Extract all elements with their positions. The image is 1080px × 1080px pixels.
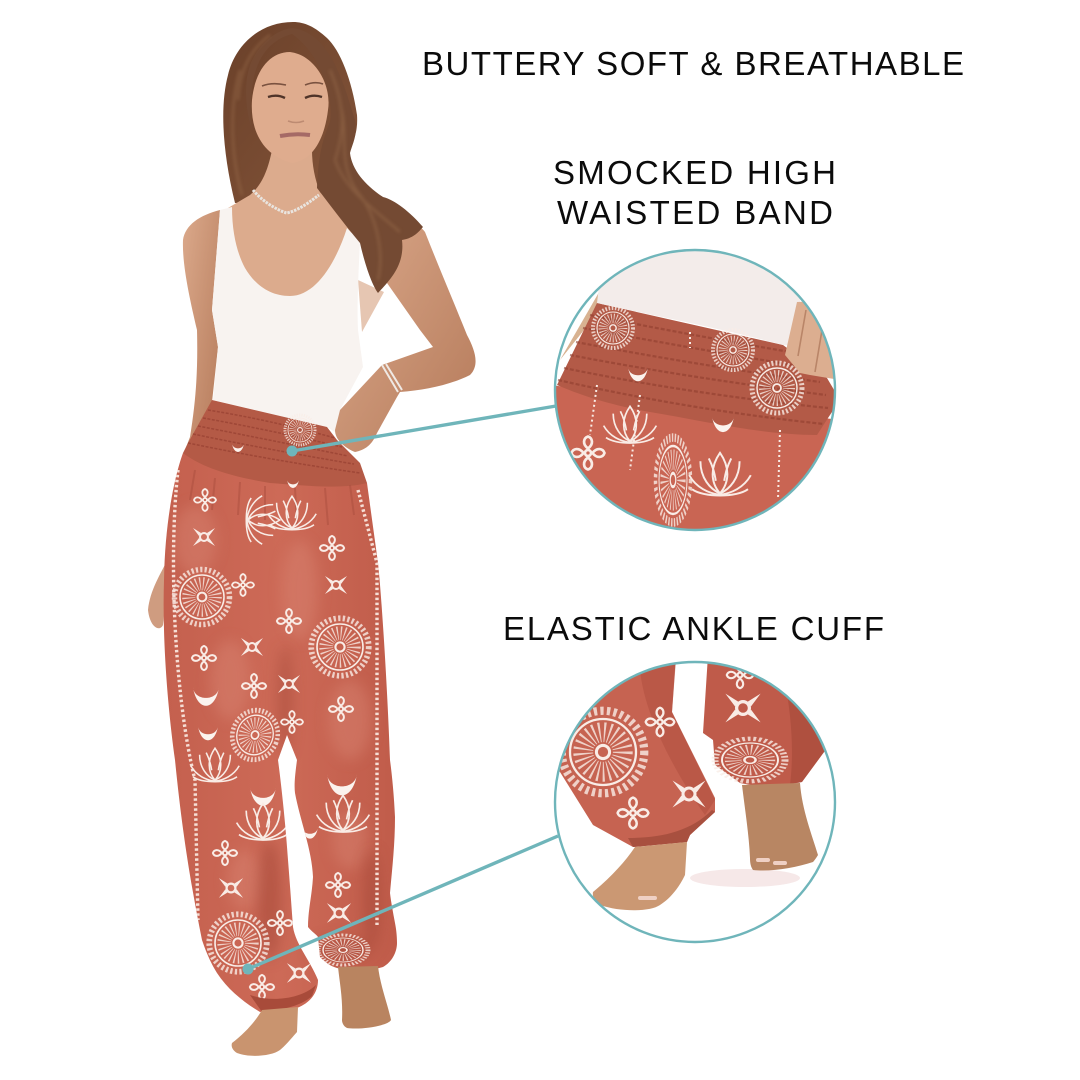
inset circle: ankle cuff detail — [550, 655, 840, 945]
waist pattern accents — [232, 415, 315, 488]
neck and chest — [228, 150, 352, 300]
pants body — [164, 453, 397, 1012]
bracelet — [382, 364, 402, 392]
inset prints — [562, 662, 785, 828]
inset ring — [555, 662, 835, 942]
mandalas — [174, 570, 369, 972]
waist gathers — [190, 470, 354, 525]
inset left pant leg — [560, 664, 715, 847]
left hand — [148, 555, 170, 628]
heading: elastic ankle cuff: ELASTIC ANKLE CUFF — [503, 610, 884, 647]
inset right foot — [742, 783, 818, 871]
back skin glimpse — [358, 280, 384, 332]
smocked waistband — [183, 400, 367, 487]
inset smocking lines — [558, 315, 828, 424]
inset left cuff — [628, 810, 715, 847]
inset hand — [785, 302, 834, 379]
facial features — [262, 83, 323, 136]
smocking lines — [188, 410, 360, 473]
fabric shadows — [258, 645, 380, 962]
heading: smocked high waisted band: SMOCKED HIGH — [553, 154, 836, 191]
inset right leg shadow — [788, 700, 824, 784]
callout line: waistband — [286, 406, 556, 456]
inset toenails — [640, 860, 785, 898]
white bodysuit — [212, 207, 363, 432]
left arm — [183, 210, 220, 455]
inset white bodysuit — [597, 245, 800, 346]
inset left foot — [593, 842, 687, 910]
heading: smocked high waisted band: WAISTED BAND — [557, 194, 833, 231]
pant pattern — [173, 470, 380, 999]
inset floor shadow — [690, 869, 800, 887]
side trims — [173, 470, 377, 925]
infographic canvas — [148, 22, 963, 1056]
fabric mottling — [173, 505, 372, 910]
inset ring — [555, 250, 835, 530]
inset right pant leg — [703, 664, 824, 785]
left ankle cuff — [250, 985, 316, 1012]
face — [252, 52, 329, 163]
necklace — [253, 190, 319, 213]
hair front — [246, 28, 423, 293]
inset pants fabric — [550, 385, 840, 535]
lotus flowers — [191, 496, 369, 840]
feet — [232, 966, 391, 1056]
inset finger gaps — [798, 310, 822, 372]
hair highlights — [233, 35, 400, 280]
right arm and hand — [335, 215, 476, 452]
inset left leg shadow — [640, 660, 715, 815]
flowers — [192, 489, 353, 999]
inset skin at hip — [560, 294, 600, 360]
moons — [193, 687, 357, 839]
pants — [164, 400, 397, 1012]
title: buttery soft & breathable: BUTTERY SOFT & BREATHABLE — [422, 45, 964, 82]
hair back — [223, 22, 357, 203]
model figure photo — [148, 22, 840, 1056]
inset smocked band — [557, 303, 840, 435]
callout line: ankle cuff — [242, 836, 558, 974]
inset circle: waistband detail — [550, 245, 840, 535]
inset prints — [572, 308, 802, 522]
heading: smocked high waisted band — [553, 154, 836, 231]
